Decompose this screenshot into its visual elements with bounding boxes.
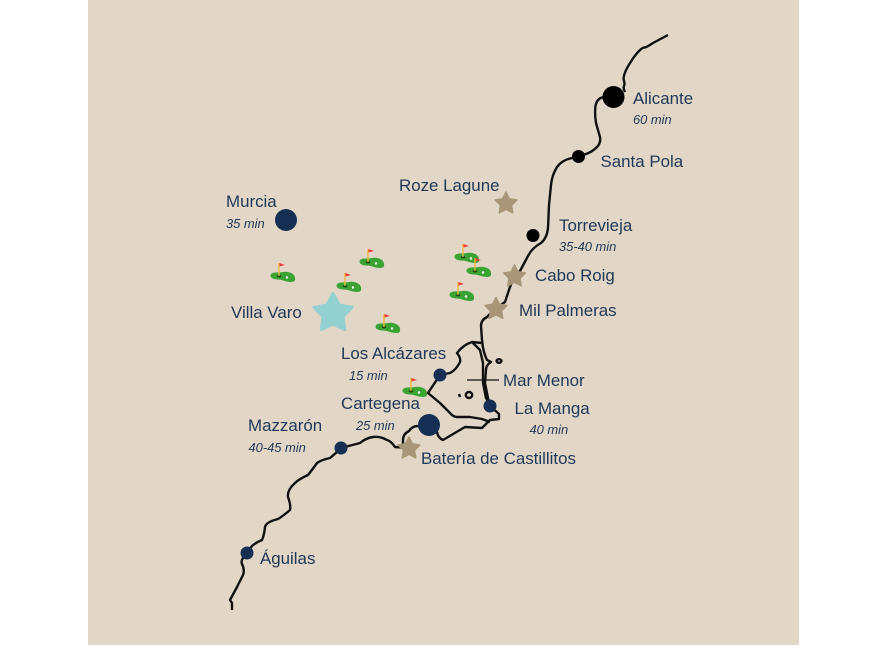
golf courses — [271, 244, 491, 397]
labels: 25 min — [355, 418, 395, 433]
labels: 40 min — [530, 422, 568, 437]
labels: Mil Palmeras — [519, 301, 617, 320]
city markers: navy — [240, 209, 496, 560]
map background panel — [88, 0, 799, 645]
labels: 35-40 min — [559, 239, 616, 254]
labels: Roze Lagune — [399, 176, 500, 195]
labels: Águilas — [260, 549, 315, 568]
labels: Murcia — [226, 192, 277, 211]
labels: Alicante — [633, 89, 693, 108]
labels: Los Alcázares — [341, 344, 446, 363]
labels: 35 min — [226, 216, 265, 231]
labels: Cartegena — [341, 394, 420, 413]
labels: Villa Varo — [231, 303, 302, 322]
labels: Cabo Roig — [535, 266, 615, 285]
labels: Santa Pola — [600, 152, 684, 171]
labels: 40-45 min — [248, 440, 306, 455]
labels: Mar Menor — [503, 371, 585, 390]
labels: Torrevieja — [559, 216, 633, 235]
labels: 15 min — [349, 368, 388, 383]
coastline — [230, 35, 668, 610]
tan stars — [398, 192, 525, 458]
labels — [226, 89, 693, 568]
Mar Menor pointer line — [467, 379, 499, 381]
labels: 60 min — [633, 112, 672, 127]
labels: Mazzarón — [248, 416, 322, 435]
Villa Varo star — [314, 294, 352, 330]
labels: Batería de Castillitos — [421, 449, 576, 468]
labels: La Manga — [514, 399, 590, 418]
city markers: black — [526, 86, 624, 242]
